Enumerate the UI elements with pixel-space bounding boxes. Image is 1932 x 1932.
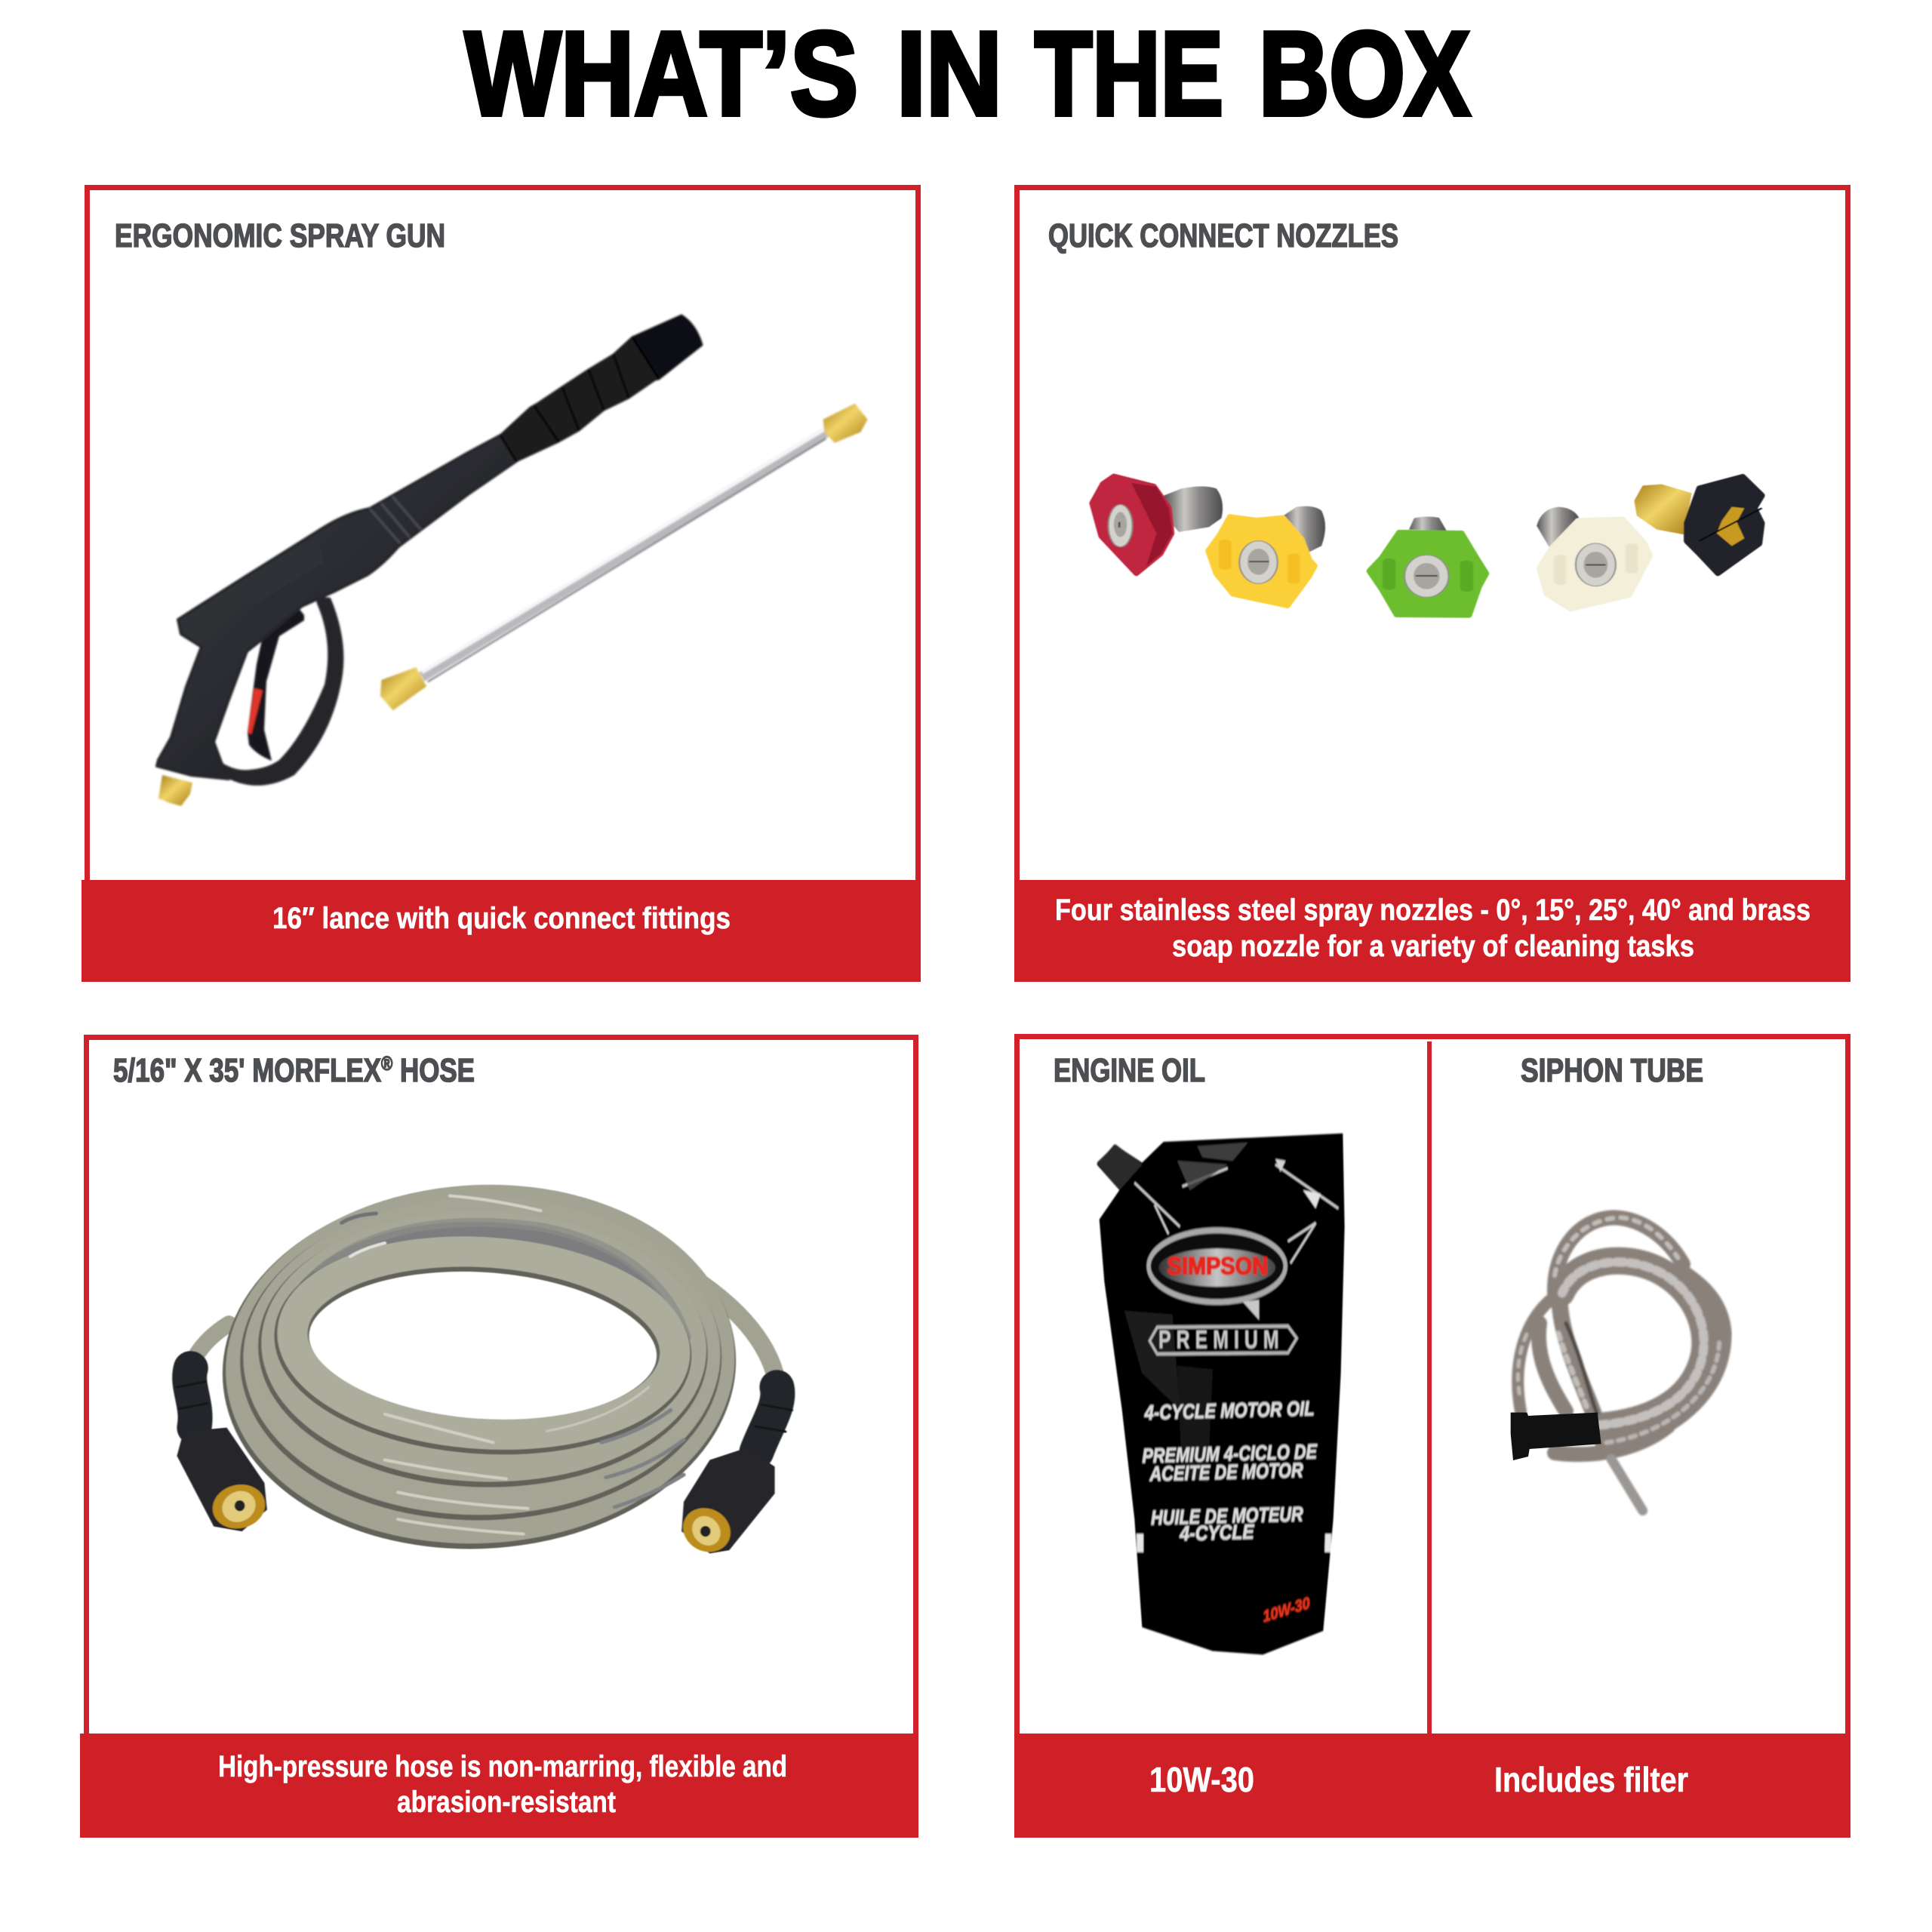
bar: spray gun caption background [82,880,921,982]
sub-element: tube highlights [1518,1217,1719,1443]
title: IN [897,8,1002,140]
sub-element: chrome lance [380,404,868,710]
caption: nozzles: Four stainless steel spray nozzles - 0°, 15°, 25°, 40° and brass [1055,894,1810,927]
sub-element: simpson logo [1149,1230,1285,1320]
caption: 10W-30: 10W-30 [1149,1760,1254,1799]
caption: hose [218,1750,787,1819]
sub-element: hose glints [342,1196,684,1534]
sub-element: pouch text [1142,1397,1318,1626]
caption: nozzles: soap nozzle for a variety of cleaning tasks [1172,930,1694,963]
icon: yellow nozzle [1208,506,1325,605]
panel: engine oil and siphon tube [1014,1037,1850,1838]
sub-element: trigger [248,608,304,761]
image: oil pouch [1097,1134,1345,1655]
sub-element: gun grip sleeve [500,315,702,461]
caption: hose: High-pressure hose is non-marring, flexible and [218,1750,787,1783]
title [465,8,1470,140]
icon: left hose coupler [177,1368,269,1531]
sub-element: pouch text: HUILE DE MOTEUR [1151,1503,1303,1529]
icon: red nozzle [1092,477,1223,573]
bar: hose caption background [80,1734,918,1838]
caption: lance: 16″ lance with quick connect fittings [272,902,731,935]
sub-element: pouch text: ACEITE DE MOTOR [1149,1459,1303,1485]
heading: ergonomic spray gun: ERGONOMIC SPRAY GUN [115,217,445,254]
panel: quick connect nozzles [1014,187,1850,982]
caption: includes filter: Includes filter [1494,1760,1688,1799]
sub-element: pouch text: 4-CYCLE [1179,1520,1255,1545]
sub-element: pouch text: 4-CYCLE MOTOR OIL [1144,1397,1315,1424]
image: spray gun [157,315,868,806]
sub-element: pouch text: 10W-30 [1262,1593,1311,1626]
image: siphon tube [1511,1217,1722,1511]
sub-element: trigger red tab [248,688,263,734]
caption: hose: abrasion-resistant [397,1786,616,1819]
icon: black soap nozzle [1634,477,1761,573]
bar: oil and siphon caption background [1014,1734,1850,1838]
heading: quick connect nozzles: QUICK CONNECT NOZZLES [1048,217,1398,254]
bar: nozzles caption background [1014,880,1850,982]
caption: nozzles [1055,894,1810,963]
icon: green nozzle [1370,516,1486,615]
image: coiled hose [177,1174,792,1558]
image: five nozzles [1092,477,1761,615]
panel: ergonomic spray gun [82,187,921,982]
title: THE [1035,8,1223,140]
sub-element: tube strands [1518,1217,1722,1454]
heading: hose: ® [381,1052,392,1075]
heading: engine oil: ENGINE OIL [1054,1052,1205,1089]
sub-element: filter connector [1511,1413,1601,1460]
title: BOX [1259,8,1470,140]
sub-element: gun brass fitting [158,775,192,806]
heading: hose: HOSE [392,1052,475,1089]
heading: hose: 5/16" X 35' MORFLEX [113,1052,451,1089]
title: WHAT’S [465,8,858,140]
sub-element: premium badge: PREMIUM [1158,1326,1284,1354]
sub-element: pouch text: PREMIUM 4-CICLO DE [1142,1440,1318,1467]
heading: siphon tube: SIPHON TUBE [1521,1052,1703,1089]
sub-element: simpson logo: SIMPSON [1168,1252,1268,1279]
sub-element: pouch cap [1097,1144,1142,1190]
panel: hose [80,1037,918,1838]
icon: white nozzle [1537,507,1650,608]
sub-element: gun guard [191,596,343,786]
sub-element: gun body [157,435,516,779]
icon: right hose coupler [678,1387,792,1554]
